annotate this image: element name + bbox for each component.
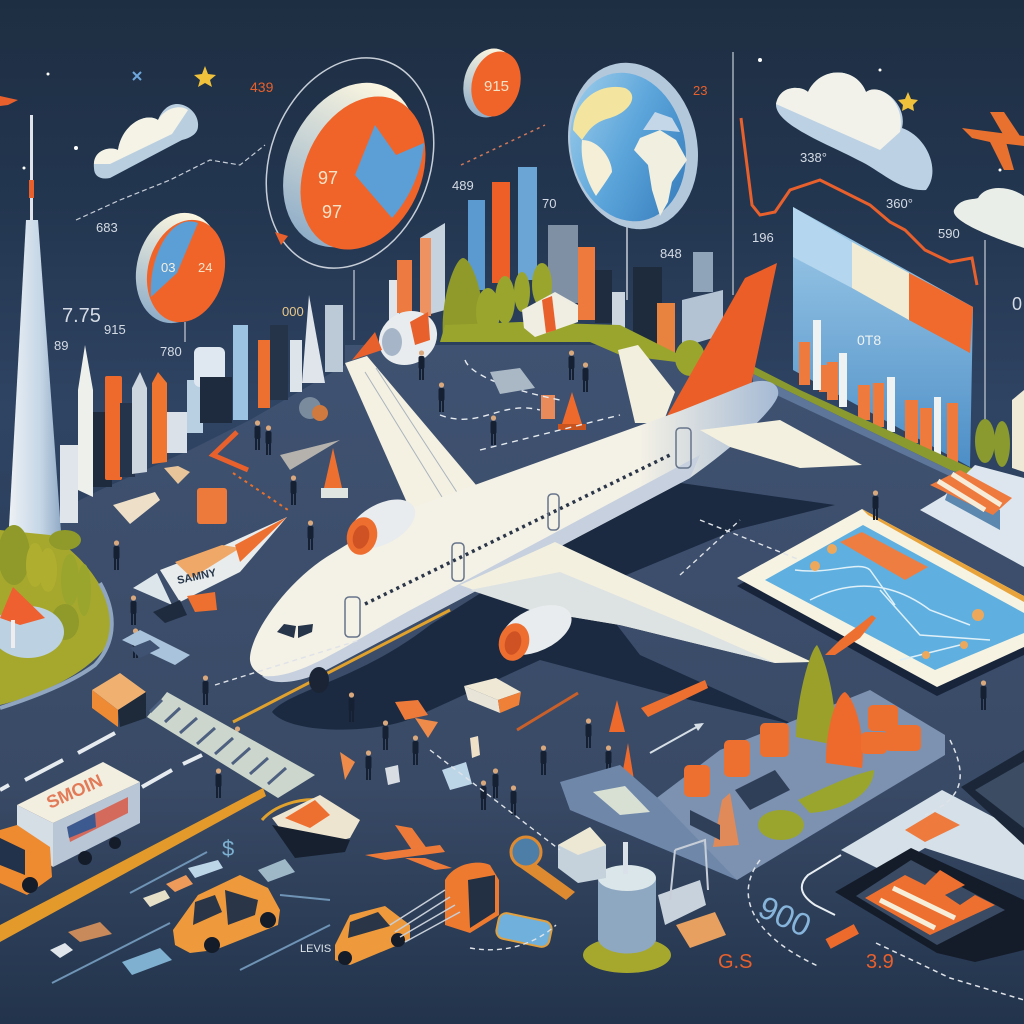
parked small plane left xyxy=(133,517,287,623)
city skyline left xyxy=(60,295,343,523)
bottom numbers: G.S xyxy=(718,951,752,973)
device on ground xyxy=(464,678,708,730)
fuselage belly shade xyxy=(262,455,700,682)
rear vertical white fin xyxy=(618,345,675,423)
pie chart small left xyxy=(124,203,236,342)
curved dashed path xyxy=(748,740,1024,1000)
thin trend line left xyxy=(76,145,265,220)
labels floating numbers: 89 xyxy=(54,338,68,353)
building right edge xyxy=(1012,390,1024,472)
trees seating xyxy=(758,645,874,840)
ground plane xyxy=(0,345,1024,1024)
fuselage xyxy=(250,381,778,680)
small orange wing tip xyxy=(825,615,876,655)
bottom numbers: 3.9 xyxy=(866,951,894,973)
ground documents xyxy=(50,836,575,983)
cloud right edge xyxy=(954,188,1024,248)
luggage cart center xyxy=(262,795,360,858)
road yellow stripe xyxy=(0,788,266,942)
pie chart small left: 03 xyxy=(161,260,175,275)
labels floating numbers: 489 xyxy=(452,178,474,193)
traffic cone center xyxy=(541,392,586,430)
labels floating numbers: 590 xyxy=(938,226,960,241)
arrow xyxy=(650,723,704,753)
labels floating numbers: 780 xyxy=(160,344,182,359)
white rounded path xyxy=(802,855,841,915)
labels floating numbers xyxy=(54,79,1022,359)
trend line center xyxy=(461,125,545,165)
vehicle orange cart xyxy=(92,673,146,727)
labels floating numbers: 23 xyxy=(693,83,707,98)
baggage truck xyxy=(390,863,499,942)
cloud top right xyxy=(776,72,932,190)
tablet map xyxy=(737,509,1024,696)
cockpit windows xyxy=(277,624,313,638)
ground documents: $ xyxy=(222,836,234,861)
stabilizer xyxy=(700,420,862,468)
near engine xyxy=(493,595,579,665)
park circular left xyxy=(0,525,113,708)
small orange planes xyxy=(365,825,452,870)
terrace vehicle xyxy=(490,368,535,394)
pie chart small left: 24 xyxy=(198,260,212,275)
gift box xyxy=(522,292,578,337)
trees right edge xyxy=(975,419,1010,467)
truck: SMOIN xyxy=(43,770,106,813)
labels floating numbers: 439 xyxy=(250,79,274,95)
parked small plane left: SAMNY xyxy=(176,567,218,587)
pie badge top: 915 xyxy=(484,78,509,95)
document panel xyxy=(841,790,1024,880)
right panel dashboard: 0T8 xyxy=(857,332,881,348)
engine far xyxy=(341,489,423,559)
crosswalks xyxy=(122,630,315,798)
city skyline center xyxy=(389,167,723,353)
runway yellow line xyxy=(233,610,450,722)
terrace hedge xyxy=(440,258,705,376)
cloud top left xyxy=(94,104,198,179)
labels floating numbers: 000 xyxy=(282,304,304,319)
pie chart large xyxy=(238,34,462,292)
market stall xyxy=(920,465,1024,567)
stars and sky marks xyxy=(22,58,1002,172)
labels floating numbers: 848 xyxy=(660,246,682,261)
plane wing far xyxy=(345,356,482,532)
doors xyxy=(345,428,691,637)
tablet lower right xyxy=(835,848,1024,962)
dashed taxi paths xyxy=(215,520,800,950)
labels floating numbers: 0 xyxy=(1012,294,1022,314)
bottom numbers: 900 xyxy=(753,889,817,944)
icon: small plane top left xyxy=(0,96,18,106)
truck xyxy=(0,762,140,895)
line chart orange xyxy=(741,118,977,285)
cabin windows xyxy=(365,454,672,604)
ground documents: LEVIS xyxy=(300,943,331,955)
labels floating numbers: 196 xyxy=(752,230,774,245)
bottom numbers xyxy=(718,889,894,973)
terrace dashed paths xyxy=(440,360,620,450)
icon: plane top right xyxy=(962,112,1024,170)
labels floating numbers: 683 xyxy=(96,220,118,235)
pie stem xyxy=(353,270,355,340)
tall tower xyxy=(8,115,62,545)
machine and cart xyxy=(558,827,726,948)
road dashes xyxy=(0,733,202,790)
tank xyxy=(583,842,671,973)
terminal items left xyxy=(113,397,348,524)
labels floating numbers: 7.75 xyxy=(62,305,101,327)
chairs xyxy=(684,705,921,847)
near wing xyxy=(460,542,812,663)
car orange xyxy=(173,875,280,953)
pie chart large: 97 xyxy=(318,168,338,188)
pie chart large: 97 xyxy=(322,202,342,222)
pie badge top xyxy=(456,42,528,124)
labels floating numbers: 360° xyxy=(886,196,913,211)
plane shadow xyxy=(272,480,835,730)
hedge under panel xyxy=(753,366,975,478)
turbine object xyxy=(352,300,447,376)
right panel dashboard xyxy=(793,207,973,467)
labels floating numbers: 915 xyxy=(104,322,126,337)
panel ledge xyxy=(753,374,975,488)
labels floating numbers: 70 xyxy=(542,196,556,211)
globe xyxy=(553,51,713,300)
cones and packages xyxy=(340,700,635,790)
orange tail fin xyxy=(663,263,777,423)
seating area platform xyxy=(560,690,945,880)
car yellow small xyxy=(335,906,410,965)
plane xyxy=(250,263,862,693)
labels floating numbers: 338° xyxy=(800,150,827,165)
vertical divider line xyxy=(733,52,985,420)
device right edge xyxy=(961,750,1024,845)
people small xyxy=(114,350,986,815)
landing gear xyxy=(309,667,329,693)
